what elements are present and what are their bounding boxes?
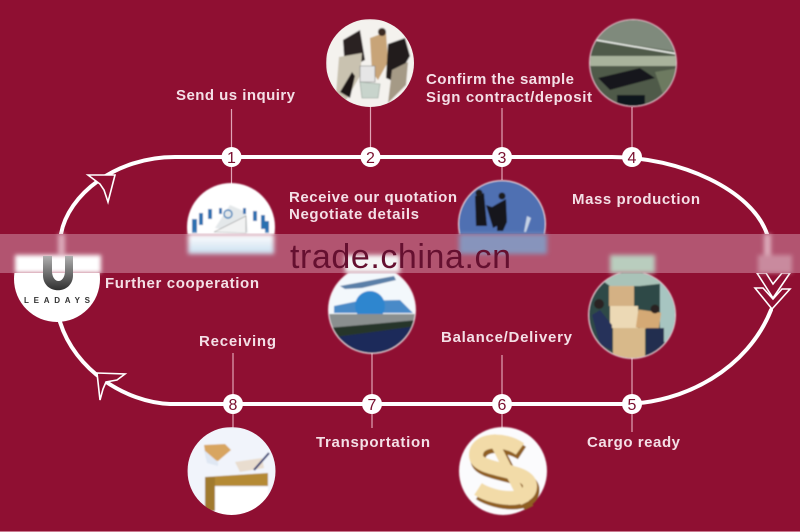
arrow: right double chevron (755, 273, 790, 309)
number badges: 1 (227, 150, 236, 167)
label: step 3: Confirm the sample (426, 71, 574, 88)
number badges: 7 (368, 397, 377, 414)
label: step 2: Negotiate details (289, 206, 419, 223)
icon: business people (326, 19, 416, 109)
icon: plane, globe and ship (328, 255, 418, 356)
icon: email network (184, 182, 278, 258)
label: step 2: Receive our quotation (289, 189, 457, 206)
number badges: 5 (628, 397, 637, 414)
number badges: 6 (498, 397, 507, 414)
faded track under band (58, 234, 792, 273)
label: step 4: Mass production (572, 191, 700, 208)
flow track: rounded loop (60, 157, 771, 404)
label: step 5: Cargo ready (587, 434, 681, 451)
number badges (222, 147, 642, 414)
icon: parcels and paperwork (187, 427, 277, 517)
number badges: 8 (229, 397, 238, 414)
number badges: 2 (366, 150, 375, 167)
number badges: 4 (628, 150, 637, 167)
label: step 3 (426, 71, 592, 106)
watermark text: trade.china.cn (290, 238, 511, 276)
arrow: bottom left (97, 373, 125, 400)
icon: LEADAYS logo: LEADAYS (24, 296, 91, 305)
icon: gold dollar sign (459, 427, 547, 515)
leader lines (232, 107, 632, 432)
icon: handshake (456, 179, 550, 256)
icon: LEADAYS logo (12, 252, 104, 322)
label: step 3: Sign contract/deposit (426, 89, 592, 106)
label: step 1: Send us inquiry (176, 87, 296, 104)
icon: factory floor (589, 19, 679, 110)
label: step 8: Receiving (199, 333, 276, 350)
label: further cooperation: Further cooperation (105, 275, 259, 292)
label: step 2 (289, 189, 457, 223)
number badges: 3 (498, 150, 507, 167)
watermark band (0, 234, 800, 273)
label: step 6: Balance/Delivery (441, 329, 573, 346)
label: step 7: Transportation (316, 434, 430, 451)
icon: cargo boxes (588, 255, 676, 360)
arrow: top left (88, 175, 115, 202)
